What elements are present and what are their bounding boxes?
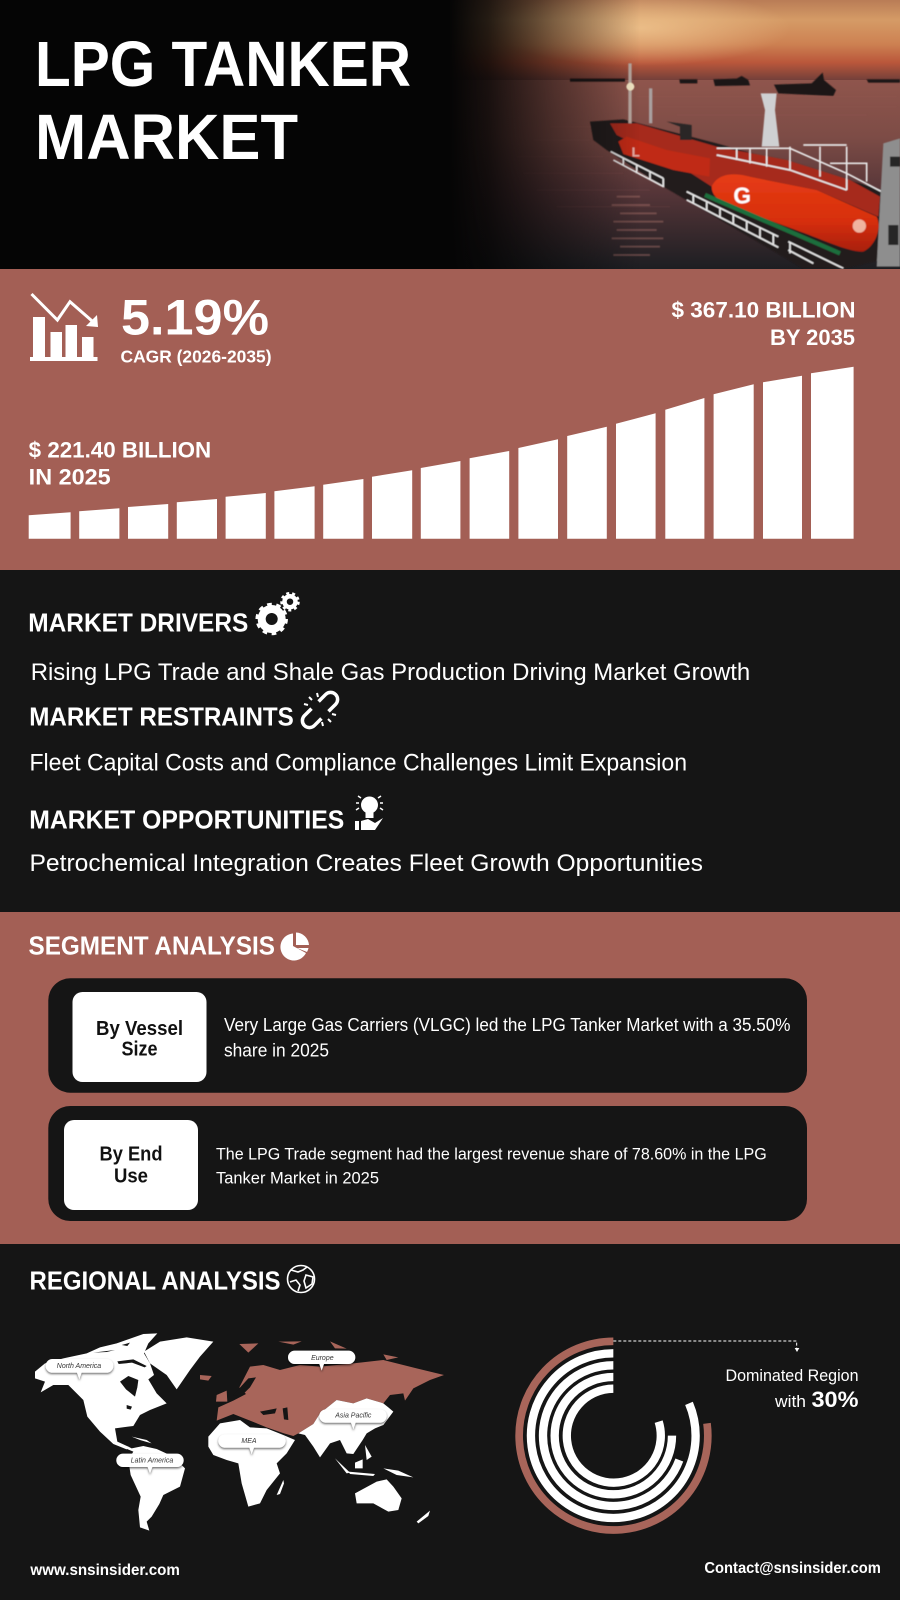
bar chart: market growth [29,367,854,539]
dominated region arc [519,1341,708,1530]
footer: contact: Contact@snsinsider.com [704,1560,881,1577]
icon: globe [288,1266,314,1292]
callout: Latin America [116,1454,184,1474]
callout: MEA: MEA [241,1438,257,1445]
panel: market size and CAGR [0,269,900,570]
panel: segment analysis [0,912,900,1244]
region: Middle East and Africa [208,1420,295,1507]
masts [626,63,779,147]
world map [35,1333,444,1531]
callout: Asia Pacific [319,1409,387,1429]
callout: Europe [288,1351,355,1371]
main red tank [712,174,879,252]
label: by vessel size: Size [122,1039,158,1061]
icon: bulb in hand [355,796,383,830]
2025 market value: $ 221.40 BILLION [29,438,211,463]
hull and deck [590,119,883,268]
icon: broken chain link [299,689,341,731]
callout: North America [46,1359,113,1379]
text: vessel size finding: share in 2025 [224,1041,329,1061]
region: Europe and Russia [200,1341,444,1436]
rear tank [618,137,710,177]
CAGR value: 5.19% [121,290,269,346]
photo: LPG tanker at sunset: L [632,145,640,160]
title [35,28,411,173]
card: by end use [48,1106,807,1221]
superstructure at right [877,138,900,267]
text: end use finding: The LPG Trade segment had the largest revenue share of 78.60% in the LPG [216,1145,767,1163]
dominated region label: with [774,1393,806,1411]
text: vessel size finding [224,1015,790,1061]
white share arcs [531,1353,696,1518]
label: by vessel size: By Vessel [96,1018,183,1040]
label: by vessel size [72,992,206,1082]
region: Latin America [115,1437,185,1531]
dashed leader with arrow [613,1341,799,1352]
panel: regional analysis [0,1244,900,1600]
heading: market restraints: MARKET RESTRAINTS [29,702,294,732]
heading: market drivers: MARKET DRIVERS [28,608,248,638]
callout: North America: North America [57,1363,101,1370]
region: Asia Pacific [298,1398,430,1523]
panel: market dynamics [0,570,900,912]
sun reflection on water [612,197,663,255]
text: market drivers: Rising LPG Trade and Shale Gas Production Driving Market Growth [31,659,750,686]
2025 market value [29,438,211,490]
dominated region label [726,1367,858,1412]
icon: pie chart [280,932,309,960]
tank letters: G [733,182,751,208]
photo: LPG tanker at sunset [450,0,900,269]
text: market opportunities: Petrochemical Integration Creates Fleet Growth Opportunities [30,850,703,877]
2035 market value: $ 367.10 BILLION [672,298,856,323]
CAGR label: CAGR (2026-2035) [120,346,272,366]
callout: Latin America: Latin America [131,1458,173,1465]
label: by end use: By End [100,1144,162,1166]
region: North America [35,1333,213,1449]
label: by end use: Use [114,1166,148,1188]
text: end use finding: Tanker Market in 2025 [216,1169,379,1187]
icon: chart with falling arrow [30,294,98,361]
heading: segment analysis: SEGMENT ANALYSIS [28,930,275,960]
seas inside Eurasia [233,1377,288,1426]
callout: Europe: Europe [311,1355,334,1362]
Hudson Bay and Arctic channels [93,1343,147,1410]
distant ships [570,73,900,96]
water ripples [611,95,834,207]
heading: market opportunities: MARKET OPPORTUNITIES [29,805,344,835]
2025 market value: IN 2025 [29,465,111,490]
text: vessel size finding: Very Large Gas Carriers (VLGC) led the LPG Tanker Market with a 35.50% [224,1015,790,1035]
footer: website: www.snsinsider.com [29,1562,180,1579]
title: LPG TANKER [35,28,411,100]
callout: MEA [218,1434,286,1454]
title: MARKET [35,101,298,173]
green stripe [705,195,840,253]
callout: Asia Pacific: Asia Pacific [334,1413,372,1420]
dominated region label: Dominated Region [726,1367,858,1385]
radial chart: regional share [519,1341,799,1530]
2035 market value [672,298,856,350]
header panel [0,0,900,269]
icon: gears [257,593,298,634]
label: by end use [64,1120,198,1210]
rails [611,145,882,268]
text: market restraints: Fleet Capital Costs and Compliance Challenges Limit Expansion [30,750,687,777]
dominated region label: 30% [812,1387,858,1412]
card: by vessel size [48,978,807,1093]
heading: regional analysis: REGIONAL ANALYSIS [30,1265,280,1295]
2035 market value: BY 2035 [770,325,855,350]
text: end use finding [216,1145,767,1187]
